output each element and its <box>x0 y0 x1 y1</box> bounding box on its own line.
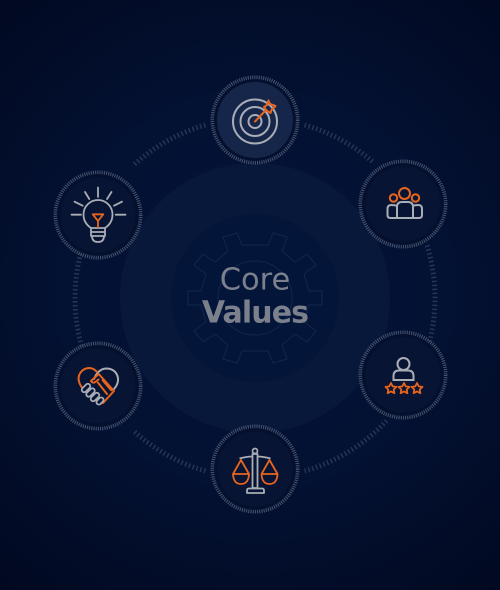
central glow discs <box>120 163 390 433</box>
node: person rating icon <box>360 332 446 418</box>
node: target icon <box>212 77 298 163</box>
node: scales icon <box>212 426 298 512</box>
gear outline <box>188 233 322 363</box>
title: Core Values <box>202 262 308 330</box>
node: lightbulb icon <box>55 172 141 258</box>
node: team icon <box>360 161 446 247</box>
dashed connecting ring <box>75 125 435 471</box>
title: Core Values: Values <box>202 296 308 330</box>
node: handshake heart icon <box>55 343 141 429</box>
title: Core Values: Core <box>220 262 290 298</box>
